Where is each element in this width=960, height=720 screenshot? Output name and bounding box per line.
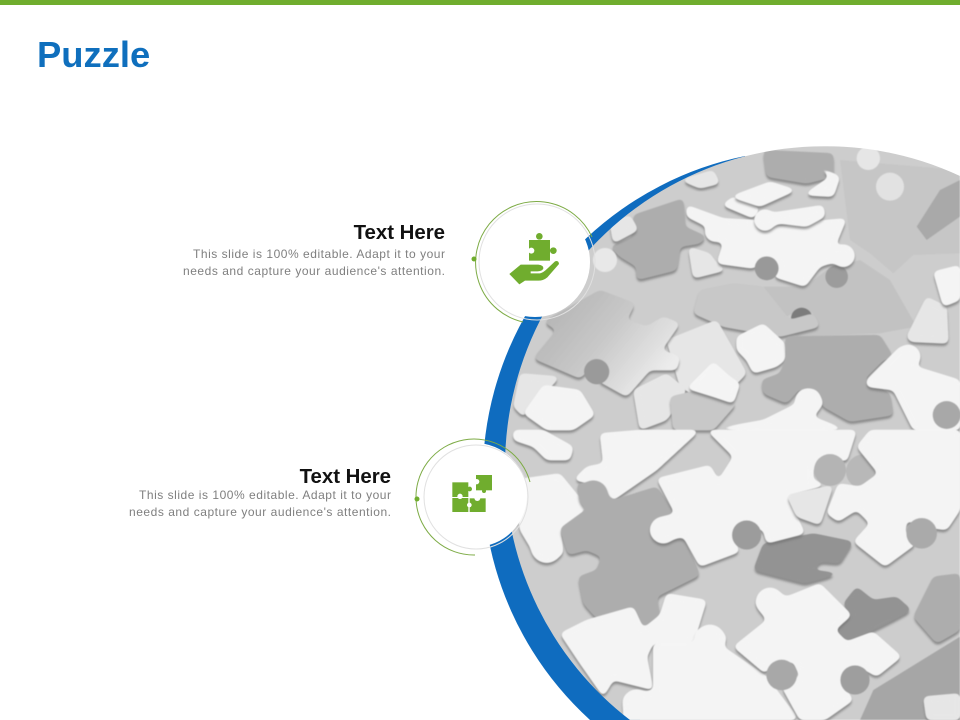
text block 1: This slide is 100% editable. Adapt it to your bbox=[193, 247, 445, 261]
icon: hand holding puzzle piece bbox=[509, 233, 559, 284]
thin grey ring 2 bbox=[424, 445, 528, 549]
text block 1 bbox=[183, 222, 445, 278]
title: Puzzle bbox=[37, 34, 150, 75]
callout 2: puzzle pieces circle bbox=[414, 439, 530, 555]
text block 2 bbox=[129, 466, 391, 519]
green dot 1 bbox=[472, 256, 476, 262]
text block 2: needs and capture your audience's attention. bbox=[129, 505, 391, 519]
blue crescent arc bbox=[483, 156, 760, 720]
green arc 1 bbox=[476, 202, 592, 322]
white disc 1 bbox=[480, 207, 590, 317]
puzzle photo circle bbox=[500, 146, 960, 720]
text block 2: Text Here bbox=[300, 466, 391, 488]
text block 2: This slide is 100% editable. Adapt it to your bbox=[139, 488, 391, 502]
lower photo pieces bbox=[513, 430, 960, 720]
icon: four puzzle pieces bbox=[452, 475, 492, 512]
green arc 2 bbox=[416, 439, 530, 555]
callout 1: hand puzzle circle bbox=[472, 202, 595, 322]
thin grey ring 1 bbox=[479, 204, 595, 320]
white disc 2 bbox=[423, 443, 527, 547]
text block 1: Text Here bbox=[354, 222, 445, 244]
green dot 2 bbox=[414, 496, 420, 502]
text block 1: needs and capture your audience's attention. bbox=[183, 264, 445, 278]
top green bar bbox=[0, 0, 960, 5]
upper photo pieces bbox=[513, 147, 960, 430]
